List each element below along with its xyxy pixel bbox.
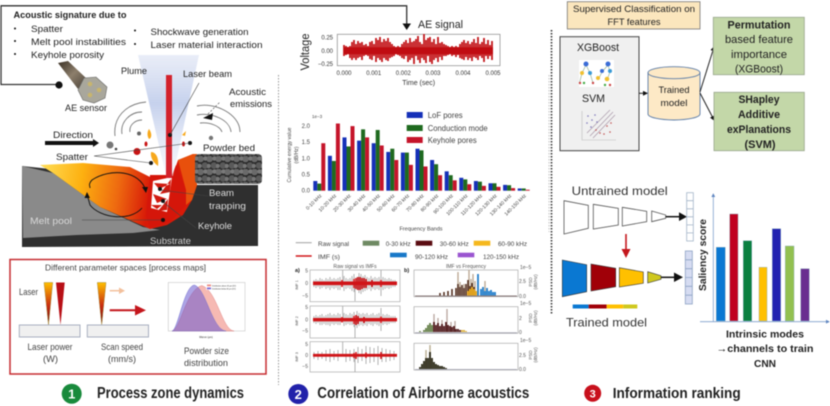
text block: acoustic signature causes: Shockwave generation <box>150 27 248 38</box>
tick labels: chart a: 5 <box>305 268 308 274</box>
axis labels: bar chart: 0.5 <box>302 172 311 178</box>
axis labels: bar chart: 70-80 kHz <box>405 193 426 214</box>
labels: illustration: Plume <box>121 66 147 77</box>
legend: IMF charts: Raw signal <box>318 241 350 248</box>
axis labels: bar chart: 100-110 kHz <box>445 193 470 217</box>
legend: bar chart: Conduction mode <box>428 124 488 133</box>
axis labels: waveform: 0.000 <box>336 71 352 77</box>
legend: IMF charts: 90-120 kHz <box>415 254 448 261</box>
axis labels: bar chart: 40-50 kHz <box>361 193 382 214</box>
axis labels: bar chart: 60-70 kHz <box>391 193 411 214</box>
chart b: IMF vs frequency <box>404 264 538 373</box>
tick labels: chart b: (dB/Hz) <box>533 310 538 326</box>
tick labels: chart a: 0 <box>305 353 308 359</box>
tick labels: chart b: 1e−5 <box>520 301 531 307</box>
legend: IMF charts <box>296 241 527 261</box>
caption: intrinsic modes <box>716 328 814 370</box>
labels: illustration: Substrate <box>150 236 191 247</box>
tick labels: chart a: 5 <box>305 305 308 311</box>
chart: AE signal waveform <box>300 34 501 87</box>
axis labels: bar chart: Cumulative energy value <box>287 127 293 183</box>
color bar: band mapping <box>573 304 637 308</box>
axis labels: bar chart: 2.0 <box>302 124 311 130</box>
axis labels: bar chart: 130-140 kHz <box>489 193 514 217</box>
arrows: classifier to model to explanations <box>639 47 714 120</box>
gray melt track <box>22 166 160 238</box>
labels: process maps: distribution <box>184 358 228 369</box>
tick labels: chart b: 2.5 <box>519 353 526 359</box>
legend: IMF charts: 30-60 kHz <box>440 241 469 248</box>
tick labels: chart b <box>519 265 538 373</box>
chart a: raw signal vs IMFs: a) <box>295 268 300 274</box>
caption: intrinsic modes: Intrinsic modes <box>726 328 804 340</box>
chart: powder size distribution: Distribution below 40 µm (D1) <box>212 288 236 290</box>
spectra row 3 <box>415 345 517 370</box>
labels: process maps: (W) <box>43 354 58 365</box>
legend: IMF charts: IMF (s) <box>318 254 340 261</box>
tick labels: chart a: 0 <box>305 281 308 287</box>
substrate <box>22 166 258 247</box>
axis labels: bar chart: 0.0 <box>302 189 311 195</box>
axis labels: bar chart: 10-20 kHz <box>318 193 338 214</box>
axis labels: bar chart: 1e−3 <box>312 114 323 119</box>
icon: laser plume <box>138 55 199 176</box>
axis labels: bar chart <box>287 114 528 232</box>
melt pool <box>40 154 197 229</box>
chart: powder size distribution: Distribution above 40 µm (D2) <box>212 284 236 288</box>
labels: process maps: Laser power <box>28 342 72 353</box>
axis labels: waveform <box>300 34 501 87</box>
caption: intrinsic modes: CNN <box>754 358 776 370</box>
panel: classifiers: SVM <box>582 93 605 105</box>
tick labels: chart a: −5 <box>302 328 308 334</box>
text block: acoustic signature causes: Acoustic signature due to <box>14 10 127 21</box>
axis labels: bar chart: 120-130 kHz <box>474 193 499 217</box>
chart a: raw signal vs IMFs <box>295 264 400 372</box>
tick labels: chart a <box>295 268 308 370</box>
labels: illustration <box>30 66 272 247</box>
box: permutation feature importance: (XGBoost) <box>735 64 783 76</box>
legend: bar chart <box>407 111 488 145</box>
arrow: direction <box>45 139 99 147</box>
icon: laser beam <box>166 75 172 178</box>
tick labels: chart b: (dB/Hz) <box>533 347 538 363</box>
tick labels: chart b: PSD <box>528 350 533 360</box>
trained output vector <box>685 251 692 304</box>
bars: conduction mode <box>317 129 526 191</box>
connector: AE sensor to AE signal <box>1 6 411 89</box>
spatter particles <box>106 129 213 166</box>
box: permutation feature importance: based feature <box>725 34 793 46</box>
box: SHAP explanations <box>714 92 804 151</box>
labels: process maps: Powder size <box>184 346 229 357</box>
tick labels: chart b: 0 <box>519 330 522 336</box>
tick labels: chart b: 0.0 <box>519 367 526 373</box>
legend: IMF charts: 0-30 kHz <box>386 241 411 248</box>
legend: IMF charts: 60-90 kHz <box>498 241 527 248</box>
text block: acoustic signature causes: Melt pool instabilities <box>31 37 126 48</box>
tick labels: chart a: 5 <box>305 342 308 348</box>
chart: saliency score <box>697 194 829 322</box>
heading box: supervised classification <box>567 2 700 29</box>
axis labels: bar chart: 140-150 kHz <box>504 193 528 217</box>
section title 3: 3 <box>590 388 596 400</box>
text block: acoustic signature causes <box>14 10 262 61</box>
acoustic emission waves <box>115 102 240 136</box>
diagram: untrained network <box>564 201 687 234</box>
icon: decision trees <box>579 60 614 87</box>
section title 1 <box>62 384 244 404</box>
tick labels: chart a: IMF 2 <box>295 316 299 326</box>
labels: illustration: Melt pool <box>30 216 72 227</box>
labels: illustration: Acoustic <box>229 87 266 98</box>
axis labels: waveform: Time (sec) <box>402 80 435 87</box>
panel: classifiers <box>560 37 639 151</box>
arrow: acoustic emission direction <box>203 113 213 120</box>
box: SHAP explanations: (SVM) <box>744 139 776 151</box>
box: permutation feature importance: importance <box>731 49 787 61</box>
chart a: raw signal vs IMFs: Raw signal vs IMFs <box>333 264 377 270</box>
tick labels: chart a: IMF 3 <box>295 352 299 362</box>
labels: illustration: trapping <box>209 201 246 212</box>
heading: untrained model: Untrained model <box>572 184 668 198</box>
labels: illustration: Spatter <box>56 152 88 163</box>
labels: illustration: Keyhole <box>198 221 232 232</box>
labels: illustration: Powder bed <box>203 143 255 154</box>
axis labels: waveform: 0.004 <box>455 71 471 77</box>
labels: process maps <box>19 287 229 369</box>
section title 2: 2 <box>295 387 302 402</box>
tick labels: chart b: 1e−5 <box>520 265 531 271</box>
panel: process zone illustration <box>14 10 272 247</box>
powder bed particles <box>195 154 262 184</box>
text block: acoustic signature causes: Keyhole porosity <box>31 50 104 61</box>
axis labels: bar chart: 80-90 kHz <box>420 193 441 214</box>
labels: illustration: Laser beam <box>183 69 232 80</box>
box: SHAP explanations: SHapley <box>738 94 780 106</box>
dividers <box>278 30 552 385</box>
spatter and callout leader lines <box>82 83 220 228</box>
box: SHAP explanations: exPlanations <box>727 124 791 136</box>
labels: illustration: Beam <box>209 188 234 199</box>
diagram: trained network <box>562 260 683 297</box>
icon: AE sensor <box>58 61 107 103</box>
label: AE sensor: AE sensor <box>65 103 107 114</box>
labels: illustration: Direction <box>53 130 93 141</box>
axis labels: bar chart: 30-40 kHz <box>347 193 368 214</box>
box: permutation feature importance <box>713 17 804 76</box>
icon: trained model cylinder: Trained <box>658 85 690 96</box>
axis labels: waveform: −0.25 <box>318 62 334 68</box>
axis labels: bar chart: (dB/Hz) <box>294 146 300 163</box>
axis labels: waveform: 0.003 <box>425 71 441 77</box>
axis labels: bar chart: 1.5 <box>302 140 311 146</box>
box: permutation feature importance: Permutation <box>728 20 791 32</box>
icon: laser power cones <box>19 282 80 337</box>
icon: scan speed <box>87 282 148 337</box>
tick labels: chart b: 2.5 <box>519 279 526 285</box>
section title 2 <box>288 384 529 404</box>
panel: process maps <box>10 260 266 374</box>
axis labels: bar chart: Frequency Bands <box>399 226 443 232</box>
labels: illustration: emissions <box>230 99 272 110</box>
axis labels: bar chart: 0-10 kHz <box>305 193 324 212</box>
panel: classifiers: XGBoost <box>577 42 619 54</box>
label: trained model: Trained model <box>566 316 647 330</box>
tick labels: chart b: (dB/Hz) <box>533 274 538 290</box>
tick labels: chart b: 2 <box>519 316 522 322</box>
axis labels: bar chart: 50-60 kHz <box>376 193 397 214</box>
chart b: IMF vs frequency: b) <box>404 268 409 274</box>
labels: process maps: (mm/s) <box>108 354 136 365</box>
chart: powder size distribution: Micron (µm) <box>199 336 213 339</box>
text block: acoustic signature causes: Spatter <box>31 24 63 35</box>
axis labels: bar chart: 20-30 kHz <box>332 193 353 214</box>
bars: LoF pores <box>313 137 522 191</box>
section title 3: Information ranking <box>613 385 741 402</box>
axis labels: waveform: 0.002 <box>396 71 411 77</box>
tick labels: chart a: −5 <box>302 294 308 300</box>
box: SHAP explanations: Additive <box>738 109 780 121</box>
tick labels: chart a: −5 <box>302 364 308 370</box>
untrained output vector <box>687 193 693 241</box>
chart b: IMF vs frequency: IMF vs Frequency <box>446 264 487 270</box>
icon: SVM scatter plot <box>582 110 616 140</box>
axis labels: bar chart: 110-120 kHz <box>460 193 484 217</box>
text block: acoustic signature causes: Laser material interaction <box>150 40 262 51</box>
tick labels: chart b: PSD <box>528 277 533 287</box>
arrow: training <box>622 234 630 258</box>
raw signal traces <box>314 270 395 372</box>
chart: cumulative energy by frequency band <box>287 111 530 232</box>
tick labels: chart b: PSD <box>528 313 533 323</box>
caption: intrinsic modes: →channels to train <box>716 343 814 355</box>
chart: powder size distribution <box>168 282 245 339</box>
IMF traces <box>313 281 397 285</box>
icon: keyhole <box>151 177 172 212</box>
labels: process maps: Laser <box>19 287 38 298</box>
axis labels: bar chart: 90-100 kHz <box>432 193 455 216</box>
tick labels: chart b: 1e−5 <box>520 338 531 344</box>
section title 1: Process zone dynamics <box>97 385 244 402</box>
spectra row 1 <box>415 270 517 296</box>
axis labels: waveform: 0.005 <box>485 71 501 77</box>
labels: process maps: Scan speed <box>101 342 143 353</box>
axis labels: waveform: 0.00 <box>321 49 334 55</box>
heading: process maps: Different parameter spaces [process maps] <box>45 262 206 272</box>
chart: saliency score: Saliency score <box>697 219 709 291</box>
axis labels: waveform: 0.25 <box>321 35 334 41</box>
axis labels: bar chart: 1.0 <box>302 156 311 162</box>
legend: IMF charts: 120-150 kHz <box>483 254 519 261</box>
tick labels: chart a: 0 <box>305 318 308 324</box>
legend: bar chart: LoF pores <box>428 111 463 120</box>
tick labels: chart b: 0.0 <box>519 294 526 300</box>
axis labels: waveform: 0.001 <box>366 71 382 77</box>
heading: AE signal: AE signal <box>418 19 463 31</box>
tick labels: chart a: IMF 1 <box>295 280 299 290</box>
icon: trained model cylinder <box>648 67 700 120</box>
section title 2: Correlation of Airborne acoustics <box>317 385 529 402</box>
legend: bar chart: Keyhole pores <box>428 136 477 145</box>
heading box: supervised classification: Supervised Classification on <box>573 4 695 15</box>
heading box: supervised classification: FFT features <box>608 17 661 28</box>
melt pool flow arrows <box>84 173 148 217</box>
spectra row 2 <box>415 309 517 333</box>
section title 1: 1 <box>68 386 75 402</box>
bars: keyhole pores <box>321 124 530 191</box>
icon: trained model cylinder: model <box>660 98 688 109</box>
axis labels: waveform: Voltage <box>300 34 312 70</box>
